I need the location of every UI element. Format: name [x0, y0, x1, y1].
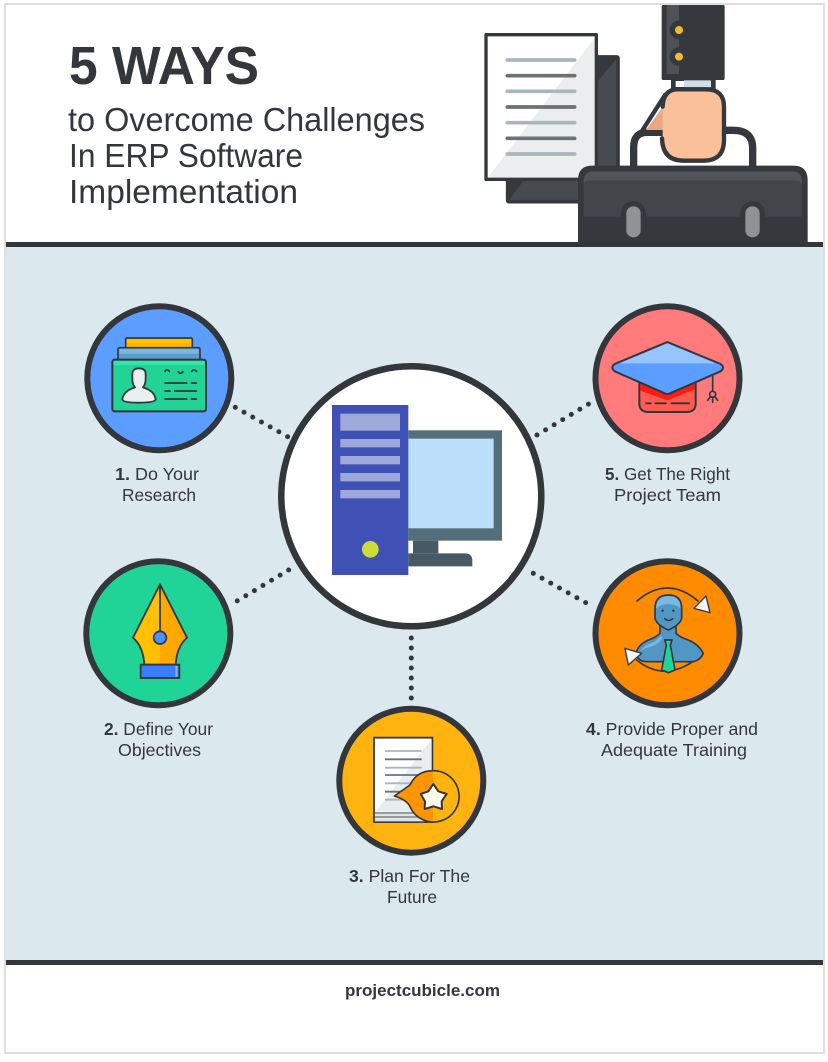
label	[586, 719, 758, 760]
label: 2. Define Your	[104, 719, 213, 739]
label: Project Team	[614, 485, 721, 505]
subtitle line 2: In ERP Software	[69, 137, 303, 174]
label: 3. Plan For The	[349, 866, 470, 886]
suit sleeve	[662, 5, 725, 80]
label: Research	[122, 485, 196, 505]
dotted connectors	[235, 402, 592, 700]
step 3: plan for the future	[339, 709, 483, 907]
bottom divider bar	[6, 960, 823, 965]
header illustration: hand holding briefcase with document	[486, 5, 808, 242]
title	[68, 36, 425, 210]
main panel background	[6, 246, 823, 960]
label	[104, 719, 213, 760]
step 5: get the right project team	[596, 306, 740, 505]
icon: id cards	[112, 338, 206, 411]
label: 1. Do Your	[115, 464, 199, 484]
document page	[486, 35, 596, 179]
label: Objectives	[118, 740, 201, 760]
briefcase handle	[634, 130, 753, 168]
briefcase	[578, 166, 808, 242]
label: 4. Provide Proper and	[586, 719, 758, 739]
icon: person with rotation arrows	[625, 588, 710, 673]
step 2: define your objectives	[86, 561, 230, 760]
icon: graduation cap	[612, 342, 723, 412]
footer url: projectcubicle.com	[345, 981, 500, 1000]
step 4: provide proper and adequate training	[586, 561, 758, 760]
icon: pen nib	[133, 584, 187, 678]
heading: 5 WAYS: 5 WAYS	[69, 36, 259, 96]
central computer circle	[281, 366, 541, 626]
shirt cuff	[673, 79, 713, 89]
back sheet	[508, 57, 618, 202]
subtitle line 3: Implementation	[69, 173, 298, 210]
label	[349, 866, 470, 907]
icon: document with star bubble	[374, 738, 459, 822]
label	[605, 464, 730, 505]
step 1: do your research	[87, 306, 231, 505]
label: Adequate Training	[601, 740, 747, 760]
label: 5. Get The Right	[605, 464, 730, 484]
top divider bar	[6, 242, 823, 247]
subtitle line 1: to Overcome Challenges	[68, 101, 425, 138]
label: Future	[387, 887, 437, 907]
hand	[641, 89, 724, 161]
label	[115, 464, 199, 505]
icon: desktop computer	[332, 405, 502, 575]
